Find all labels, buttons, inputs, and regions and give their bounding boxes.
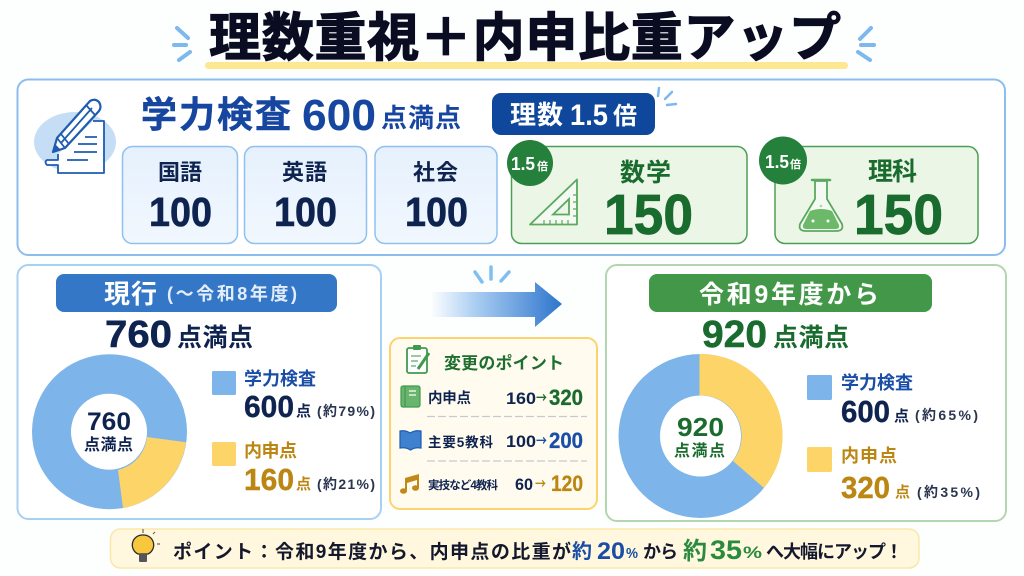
subject card: science: 150	[854, 183, 943, 247]
heading: written exam score: 600	[302, 91, 376, 140]
icon: badge sparkle	[658, 88, 676, 105]
subject card: English: 100	[274, 189, 337, 235]
legend: 920 breakdown: 内申点	[841, 446, 897, 466]
total: 760: 点満点	[177, 324, 253, 352]
legend: 760 breakdown: 160	[244, 462, 294, 497]
subject card: English	[244, 146, 366, 244]
subject card: social studies: 100	[405, 189, 468, 235]
icon: open book	[400, 431, 421, 450]
legend: 920 breakdown: 600	[841, 394, 890, 429]
icon: arrow sparkle	[475, 267, 509, 282]
panel header: current: (～令和8年度)	[167, 283, 297, 304]
title text: 理数重視＋内申比重アップ	[209, 10, 841, 68]
subject card: math	[507, 140, 747, 247]
icon: clipboard	[407, 345, 429, 373]
badge: science 1.5x: 1.5	[765, 152, 789, 172]
icon: green book	[401, 386, 420, 407]
row: four practical subjects	[400, 471, 583, 496]
icon: left sparkle	[174, 28, 190, 60]
icon: music note	[400, 474, 419, 494]
panel: key changes	[390, 338, 597, 509]
total: 920: 点満点	[773, 324, 849, 352]
badge: science and math 1.5x	[492, 93, 655, 135]
panel: new system	[606, 265, 1006, 521]
subject card: social studies	[375, 146, 497, 244]
row: internal grade points: 160	[506, 389, 536, 408]
callout text: ポイント：令和9年度から、内申点の比重が	[173, 540, 571, 563]
badge: science 1.5x: 倍	[790, 157, 801, 171]
row: internal grade points	[401, 385, 583, 410]
total: 760	[105, 314, 253, 356]
heading: key changes: 変更のポイント	[444, 353, 564, 373]
heading: written exam score	[141, 91, 461, 140]
row: five core subjects: 100	[506, 432, 536, 451]
donut chart: 760: 760	[87, 408, 131, 436]
heading: written exam score: 点満点	[381, 103, 461, 133]
donut chart: 920: 点満点	[674, 441, 725, 460]
callout text: へ大幅にアップ！	[766, 542, 903, 562]
legend: 760 breakdown: 内申点	[244, 441, 297, 461]
badge: math 1.5x: 倍	[537, 159, 548, 173]
legend: 760 breakdown: 点	[296, 402, 311, 420]
callout text: 約	[683, 538, 707, 565]
callout text: 約	[572, 540, 592, 563]
legend: 920 breakdown: (約35%)	[917, 484, 980, 500]
legend: 760 breakdown	[212, 368, 375, 497]
callout text: から	[643, 542, 678, 562]
arrow: current to new	[430, 267, 562, 327]
icon: right sparkle	[858, 28, 874, 60]
row: five core subjects	[400, 428, 583, 453]
callout: key point	[110, 529, 919, 568]
panel: written exam	[18, 80, 1005, 255]
total: 920: 920	[702, 314, 767, 356]
callout text: 35	[710, 535, 742, 565]
badge: science and math 1.5x: 倍	[613, 103, 637, 130]
legend: 760 breakdown: 点	[296, 475, 311, 493]
donut chart: 920	[618, 354, 783, 518]
icon: set square	[530, 180, 577, 224]
badge: math 1.5x	[507, 140, 553, 186]
total: 920	[702, 314, 849, 356]
callout text	[173, 535, 903, 565]
legend: 760 breakdown: 学力検査	[244, 368, 316, 389]
icon: pencil and paper	[34, 100, 116, 173]
row: four practical subjects: 120	[551, 471, 583, 496]
row: internal grade points: 320	[549, 385, 583, 410]
callout text: %	[743, 543, 762, 562]
badge: science 1.5x	[759, 136, 807, 184]
row: five core subjects: →	[536, 431, 547, 451]
panel header: current	[56, 274, 337, 312]
panel: current system	[18, 265, 381, 519]
icon: flask	[800, 180, 842, 231]
legend: 760 breakdown: (約79%)	[317, 403, 375, 419]
legend: 760 breakdown: 600	[244, 389, 294, 424]
subject card: math: 数学	[620, 159, 671, 187]
donut chart: 920: 920	[677, 412, 724, 442]
legend: 920 breakdown: 点	[894, 407, 909, 425]
callout text: %	[626, 545, 638, 562]
badge: science and math 1.5x: 理数	[510, 100, 563, 130]
row: four practical subjects: 60	[515, 475, 533, 494]
badge: math 1.5x: 1.5	[511, 154, 535, 174]
subject card: Japanese: 国語	[158, 160, 202, 185]
panel header: current: 現行	[104, 279, 157, 309]
legend: 920 breakdown: 点	[895, 483, 910, 501]
panel header: new	[649, 274, 932, 312]
subject card: Japanese	[122, 146, 238, 244]
subject card: science	[759, 136, 978, 247]
row: five core subjects: 主要5教科	[428, 434, 494, 450]
badge: science and math 1.5x: 1.5	[570, 99, 608, 132]
row: five core subjects: 200	[549, 428, 583, 453]
title	[205, 10, 848, 69]
heading: written exam score: 学力検査	[141, 94, 291, 135]
legend: 760 breakdown: (約21%)	[317, 476, 375, 492]
subject card: English: 英語	[282, 160, 327, 185]
subject card: Japanese: 100	[149, 189, 212, 235]
total: 760: 760	[105, 314, 172, 356]
title underline	[205, 62, 848, 69]
row: internal grade points: →	[536, 388, 547, 408]
subject card: science: 理科	[868, 158, 917, 186]
panel header: new: 令和9年度から	[699, 281, 879, 309]
donut chart: 760: 点満点	[84, 435, 133, 454]
icon: light bulb	[132, 529, 160, 562]
legend: 920 breakdown: 320	[841, 470, 890, 505]
legend: 920 breakdown: (約65%)	[915, 407, 978, 423]
row: four practical subjects: 実技など4教科	[428, 478, 498, 492]
legend: 920 breakdown	[807, 372, 980, 505]
subject card: math: 150	[604, 183, 693, 247]
donut chart: 760	[32, 354, 187, 509]
row: four practical subjects: →	[535, 474, 546, 494]
callout text: 20	[597, 538, 625, 565]
subject card: social studies: 社会	[413, 160, 458, 185]
row: internal grade points: 内申点	[428, 389, 472, 407]
legend: 920 breakdown: 学力検査	[841, 372, 913, 393]
